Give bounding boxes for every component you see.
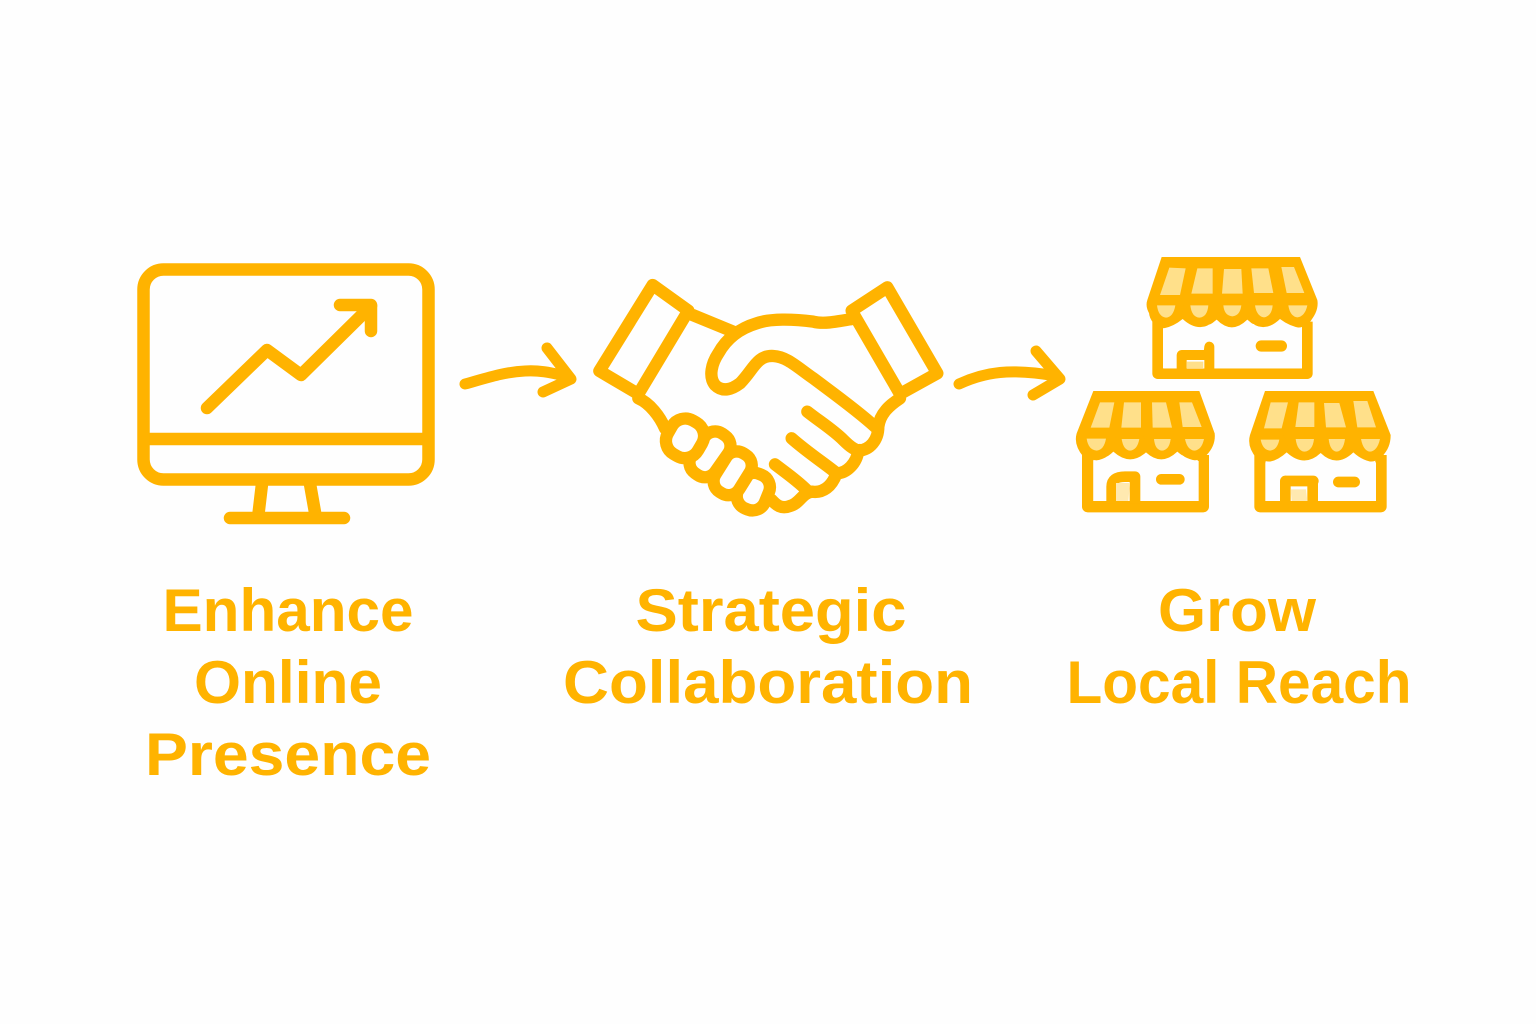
icon: three storefronts	[1076, 257, 1391, 507]
label: Strategic Collaboration: Strategic	[636, 577, 906, 644]
store: top	[1147, 257, 1318, 374]
label: Enhance Online Presence: Enhance	[162, 577, 414, 644]
store: bottom left	[1076, 391, 1215, 507]
icon: handshake	[599, 285, 937, 514]
store: bottom right	[1249, 391, 1391, 507]
label: Enhance Online Presence	[145, 577, 431, 788]
label: Grow Local Reach: Local Reach	[1066, 649, 1412, 716]
label: Strategic Collaboration	[563, 577, 973, 716]
label: Enhance Online Presence: Presence	[145, 721, 431, 788]
label: Enhance Online Presence: Online	[194, 649, 382, 716]
label: Grow Local Reach	[1066, 577, 1412, 716]
label: Grow Local Reach: Grow	[1158, 577, 1316, 644]
label: Strategic Collaboration: Collaboration	[563, 649, 973, 716]
icon: monitor with rising chart	[143, 270, 429, 518]
arrow: handshake to stores	[959, 351, 1060, 395]
arrow: monitor to handshake	[465, 348, 571, 392]
